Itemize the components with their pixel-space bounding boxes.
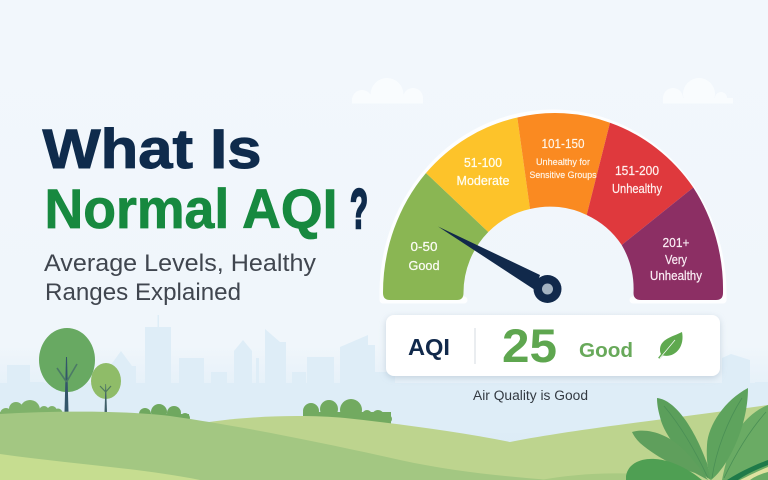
cloud left (352, 78, 423, 111)
middle bushes (139, 404, 190, 424)
tree small (91, 363, 121, 412)
leaf veins (664, 398, 766, 478)
title: Normal AQI (44, 177, 338, 240)
label: 201+ very unhealthy: Unhealthy (650, 269, 703, 283)
subtitle (44, 250, 317, 306)
label: 201+ very unhealthy: 201+ (662, 235, 690, 250)
label: 0-50 good: Good (408, 258, 440, 273)
leaf lower left (626, 459, 702, 480)
hill right (490, 405, 768, 480)
gauge (383, 113, 723, 303)
label: 51-100 moderate (456, 155, 510, 188)
label: 101-150 (530, 136, 597, 181)
right bushes (303, 399, 392, 425)
label: 201+ very unhealthy (650, 235, 703, 283)
subtitle: Ranges Explained (45, 279, 241, 306)
hill main (0, 412, 550, 480)
leaf upper centre (707, 388, 748, 480)
hill back (190, 416, 560, 480)
segment: unhealthy (587, 123, 693, 245)
hill bottom band (540, 473, 640, 480)
panel label: AQI (408, 334, 450, 360)
hill front left (0, 454, 200, 480)
leaf upper left (657, 398, 711, 480)
label: 0-50 good: 0-50 (410, 239, 438, 254)
segment: unhealthy for sensitive groups (517, 113, 610, 215)
AQI value: 25 (502, 319, 557, 372)
leaf mid left (632, 431, 708, 480)
segment: good (383, 173, 488, 300)
label: 101-150: Sensitive Groups (530, 170, 597, 181)
plant (626, 388, 768, 480)
AQI reading panel (386, 315, 720, 376)
cloud right (663, 78, 733, 110)
caption: Air Quality is Good (473, 388, 588, 403)
segment: moderate (426, 118, 530, 232)
label: 151-200 unhealthy: Unhealthy (612, 182, 663, 196)
title: What Is (42, 117, 262, 180)
segment: very unhealthy (622, 188, 723, 300)
tree large (39, 328, 95, 412)
leaf far right (722, 405, 768, 480)
needle (438, 226, 562, 303)
label: 151-200 unhealthy: 151-200 (615, 163, 659, 178)
title (42, 117, 368, 240)
city skyline (0, 315, 768, 433)
label: 0-50 good (408, 239, 440, 273)
left bushes (0, 400, 62, 420)
leaf dark stripe (727, 460, 768, 480)
title: ? (350, 177, 368, 240)
gauge halo (383, 113, 723, 300)
label: 151-200 unhealthy (612, 163, 663, 196)
subtitle: Average Levels, Healthy (44, 250, 317, 277)
label: 201+ very unhealthy: Very (665, 253, 688, 267)
icon: leaf (658, 332, 683, 358)
label: 101-150: 101-150 (542, 136, 584, 151)
label: 51-100 moderate: Moderate (456, 173, 510, 188)
status: Good (579, 340, 633, 362)
label: 51-100 moderate: 51-100 (464, 155, 502, 170)
label: 101-150: Unhealthy for (536, 157, 590, 168)
